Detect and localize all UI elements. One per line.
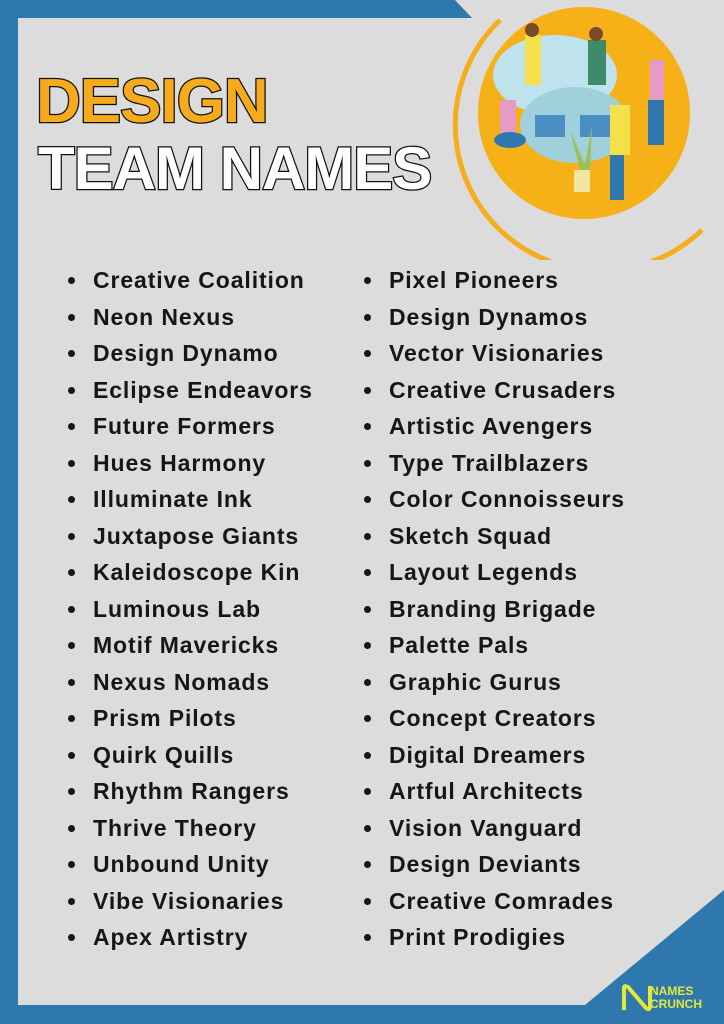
title: DESIGN: DESIGN [36,67,268,136]
logo: Names Crunch: NAMES [650,984,693,998]
list column 2: Vector Visionaries [389,340,604,366]
list column 2: Concept Creators [389,705,596,731]
list column 1: Motif Mavericks [93,632,279,658]
logo: Names Crunch: CRUNCH [650,997,702,1011]
list column 2: Vision Vanguard [389,814,582,840]
title: TEAM NAMES: TEAM NAMES [38,135,431,202]
list column 2: Artistic Avengers [389,413,593,439]
list column 1: Unbound Unity [93,851,270,877]
list column 1: Creative Coalition [93,267,305,293]
list column 2: Type Trailblazers [389,450,589,476]
list column 1: Eclipse Endeavors [93,376,313,402]
logo: Names Crunch [622,984,702,1012]
list column 1: Illuminate Ink [93,486,253,512]
list column 2: Branding Brigade [389,596,596,622]
list column 2: Creative Comrades [389,888,614,914]
list column 2: Palette Pals [389,632,529,658]
list column 1: Luminous Lab [93,596,261,622]
list column 2: Design Dynamos [389,304,588,330]
list column 2: Design Deviants [389,851,581,877]
list column 1: Hues Harmony [93,450,266,476]
list column 2 [364,267,625,950]
list column 1 [68,267,313,950]
list column 2: Sketch Squad [389,522,552,548]
list column 1: Apex Artistry [93,924,248,950]
list column 2: Graphic Gurus [389,668,562,694]
list column 1: Nexus Nomads [93,668,270,694]
list column 1: Thrive Theory [93,814,257,840]
illustration: team around table [452,7,704,260]
list column 1: Kaleidoscope Kin [93,559,300,585]
list column 1: Prism Pilots [93,705,237,731]
list column 2: Pixel Pioneers [389,267,559,293]
list column 2: Layout Legends [389,559,578,585]
list column 1: Design Dynamo [93,340,279,366]
list column 1: Neon Nexus [93,304,235,330]
list column 2: Color Connoisseurs [389,486,625,512]
list column 1: Vibe Visionaries [93,888,284,914]
list column 2: Print Prodigies [389,924,566,950]
list column 1: Quirk Quills [93,742,234,768]
list column 2: Creative Crusaders [389,376,616,402]
bottom right blue triangle [585,890,724,1005]
list column 2: Artful Architects [389,778,584,804]
list column 1: Rhythm Rangers [93,778,290,804]
list column 2: Digital Dreamers [389,742,586,768]
list column 1: Future Formers [93,413,276,439]
list column 1: Juxtapose Giants [93,522,299,548]
